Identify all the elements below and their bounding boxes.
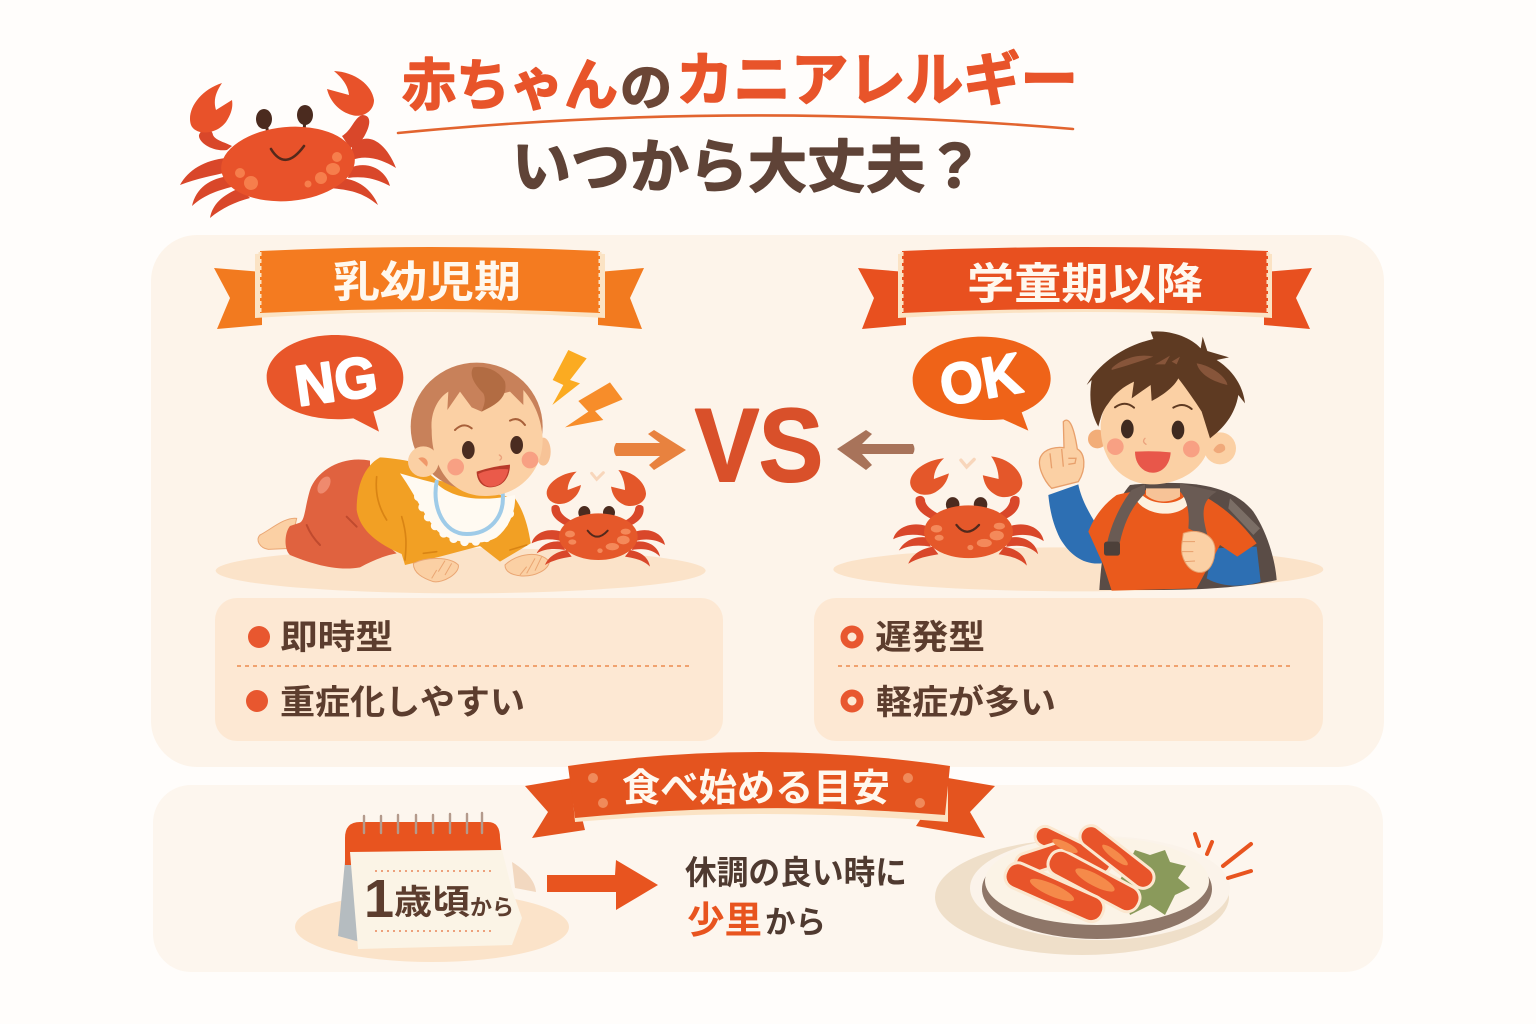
panel: school age characteristics	[814, 598, 1323, 741]
arrow: calendar to advice	[547, 860, 658, 910]
crab stick pieces	[1001, 821, 1158, 925]
hands	[413, 554, 549, 582]
banner: eating guideline	[525, 752, 995, 838]
illustration: school child with crab, OK	[833, 331, 1323, 591]
banner: infancy	[214, 247, 644, 329]
title: line 1	[402, 33, 1078, 122]
arrow: toward VS from left	[614, 430, 686, 470]
ground shadow left	[216, 548, 706, 593]
raised hand	[1039, 420, 1084, 488]
banner: infancy: 乳幼児期	[333, 248, 521, 310]
title: line 2: いつから大丈夫？	[512, 120, 984, 204]
bullet: immediate type: 即時型	[280, 610, 393, 659]
icon: crab sticks on plate	[935, 821, 1230, 955]
foot	[258, 518, 297, 549]
heading: VS: VS	[695, 388, 823, 504]
icon: sparkle marks	[1195, 834, 1251, 878]
pants	[285, 459, 397, 569]
shirt	[357, 457, 531, 565]
speech bubble: OK	[913, 337, 1051, 431]
bullet: delayed type: 遅発型	[875, 610, 985, 659]
text: advice	[685, 846, 907, 944]
text: advice: 少里	[687, 890, 762, 944]
crab: small, baby side	[532, 470, 665, 567]
ground shadow right	[833, 547, 1323, 591]
arrow: toward VS from right	[837, 430, 914, 470]
panel: infancy characteristics	[215, 598, 723, 741]
head	[411, 363, 543, 491]
banner: school age	[858, 247, 1312, 329]
calendar text: から	[470, 890, 514, 922]
icon: lightning bolts	[552, 350, 623, 427]
title underline	[398, 115, 1073, 133]
bullet: prone to severity: 重症化しやすい	[280, 675, 525, 724]
speech bubble: OK: OK	[935, 341, 1027, 419]
head	[1101, 374, 1210, 484]
icon: calendar	[295, 813, 569, 962]
face	[1115, 404, 1192, 409]
shirt	[1088, 490, 1257, 591]
title: line 1: 赤ちゃん	[402, 41, 618, 122]
gripping hand	[1181, 531, 1215, 572]
ears	[1088, 430, 1107, 448]
bullet: often mild: 軽症が多い	[876, 675, 1056, 724]
calendar text	[364, 869, 514, 929]
calendar text: 歳頃	[394, 875, 470, 924]
title: line 1: の	[620, 48, 672, 120]
crab: small, child side	[893, 456, 1044, 566]
hair	[1087, 331, 1245, 438]
panel: when to start eating	[153, 785, 1383, 972]
text: advice: 休調の良い時に	[685, 846, 907, 894]
speech bubble: NG: NG	[291, 344, 381, 419]
leaf	[1120, 850, 1190, 915]
straps	[1105, 484, 1145, 555]
speech bubble: NG	[267, 335, 403, 432]
title: line 1: カニアレルギー	[676, 33, 1078, 117]
child figure	[1039, 331, 1277, 591]
calendar text: 1	[364, 869, 394, 929]
illustration: baby with crab, NG	[216, 335, 706, 593]
blue sleeves	[1048, 484, 1107, 564]
text: advice: から	[765, 897, 826, 942]
panel: comparison	[151, 235, 1384, 767]
banner: eating guideline: 食べ始める目安	[622, 757, 890, 812]
icon: large crab	[180, 71, 396, 218]
banner: school age: 学童期以降	[967, 250, 1203, 312]
backpack	[1099, 483, 1277, 590]
bib	[400, 473, 515, 543]
